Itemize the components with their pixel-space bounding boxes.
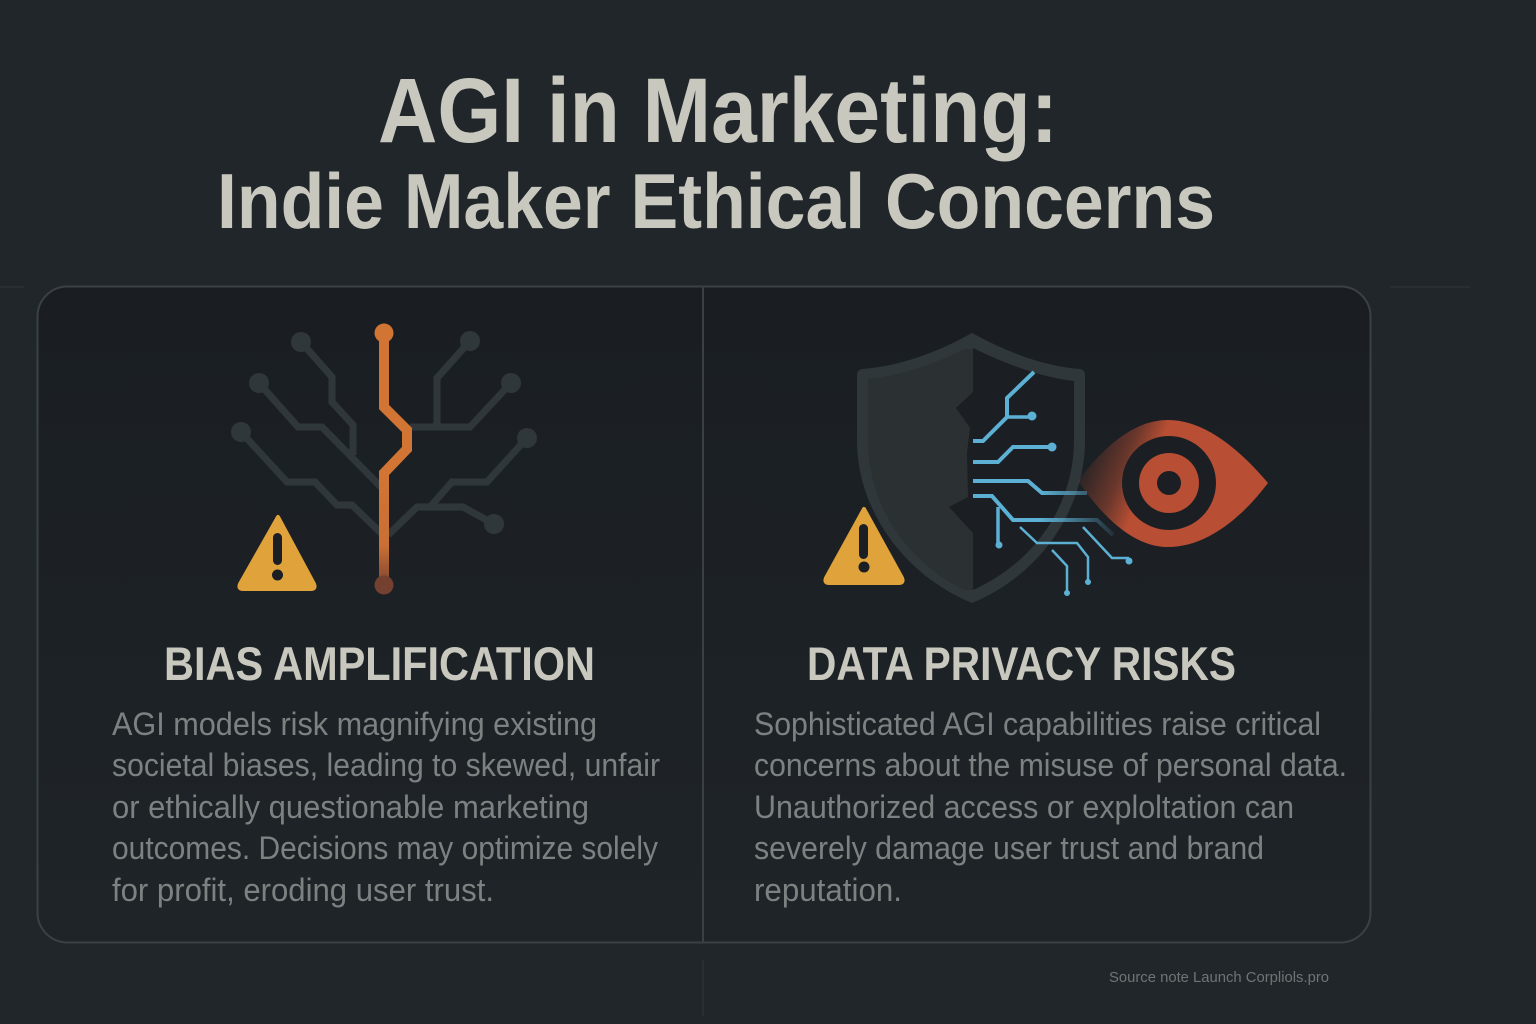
text block: bias description: for profit, eroding user trust. <box>112 872 494 908</box>
text block: bias description <box>112 706 660 908</box>
heading: bias amplification: BIAS AMPLIFICATION <box>164 637 595 690</box>
source note: Source note Launch Corpliols.pro <box>1109 970 1329 986</box>
text block: privacy description: concerns about the misuse of personal data. <box>754 747 1347 783</box>
text block: privacy description: severely damage user trust and brand <box>754 830 1264 866</box>
panel: concerns card <box>38 286 1370 942</box>
text block: bias description: societal biases, leading to skewed, unfair <box>112 747 660 783</box>
text block: privacy description: reputation. <box>754 872 902 908</box>
icon: circuit lines <box>973 372 1132 596</box>
text block: bias description: or ethically questionable marketing <box>112 789 589 825</box>
text block: privacy description: Unauthorized access or exploltation can <box>754 789 1294 825</box>
text block: privacy description: Sophisticated AGI capabilities raise critical <box>754 706 1321 742</box>
icon: cracked shield <box>857 333 1085 603</box>
title <box>217 60 1215 245</box>
text block: bias description: AGI models risk magnifying existing <box>112 706 597 742</box>
icon: warning triangle <box>825 509 903 583</box>
title: Indie Maker Ethical Concerns <box>217 157 1215 245</box>
icon: branching tree with highlighted path <box>231 324 537 594</box>
text block: bias description: outcomes. Decisions may optimize solely <box>112 830 658 866</box>
text block: privacy description <box>754 706 1347 908</box>
title: AGI in Marketing: <box>378 60 1058 162</box>
panel: bias amplification <box>112 324 660 908</box>
heading: data privacy risks: DATA PRIVACY RISKS <box>807 637 1236 690</box>
panel: data privacy risks <box>754 333 1347 908</box>
icon: warning triangle <box>239 517 315 589</box>
icon: red eye <box>1078 420 1268 547</box>
